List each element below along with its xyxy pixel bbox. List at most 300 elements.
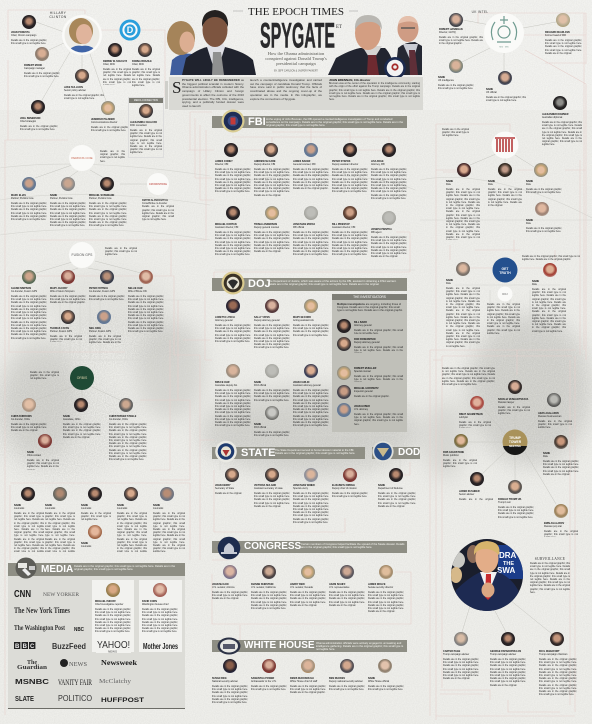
logos: news outlets: Newsweek: [101, 659, 137, 667]
logos: news outlets: McClatchy: [99, 678, 132, 685]
logo: Fusion GPS: FUSION GPS: [72, 253, 92, 257]
person: Nellie Ohr: Wife of Bruce Ohr: [128, 290, 147, 293]
person: Harry Reid: [290, 565, 326, 612]
banner: media: MEDIA: [41, 564, 73, 575]
person: Paul Manafort: PAUL MANAFORT: [539, 650, 560, 653]
person: John Huber: [337, 403, 403, 427]
person: John Podesta: JOHN PODESTA: [11, 31, 30, 34]
person: left of blue logo: Role: [446, 282, 451, 285]
person: John Huber: Details are in the original graphic; this small type is not legible here. Details are in the original graphic; this small type is not legible here.: [354, 413, 403, 426]
person: Donna Brazile: DONNA BRAZILE: [132, 60, 152, 63]
person: Jennifer Palmieri: Communications director: [91, 121, 117, 124]
logos: news outlets: Guardian: [17, 664, 47, 671]
person: Orbis associate: Associate, Orbis: [63, 418, 80, 421]
person: Samantha Power: [251, 659, 287, 695]
person: Jennifer Palmieri: Details are in the original graphic; this small type is not legible here.: [91, 126, 129, 132]
person: Michael Horowitz: [337, 385, 403, 398]
person: Nellie Ohr: [128, 270, 164, 333]
person: Jonathan Winer: [293, 468, 329, 532]
person: UK intelligence officer: Details are in the original graphic; this small type is not legible here.: [438, 84, 474, 90]
person: Jared Kushner: Senior adviser: [459, 493, 474, 496]
person: second official: Details are in the original graphic; this small type is not legible here. Details are in the original graphic; this small type is not legible here. Details are in the original.: [488, 188, 522, 207]
person: Bill Priestap: Details are in the original graphic; this small type is not legible here. Details are in the original graphic; this small type is not legible here. Details are in the original graphic; this small type is not legible here. Details are in the original graphic; this small type is not legible here.: [332, 231, 368, 256]
person: Jared Kushner: JARED KUSHNER: [459, 490, 480, 493]
person: Rob Goldstone: [443, 434, 477, 468]
person: journalist five: [153, 487, 185, 552]
heading and text: surveillance: Details are in the original graphic; this small type is not legible here. Details are in the original graphic; this small type is not legible here. Details are in the original graphic; this small type is not legible here. Details are in the original graphic; this small type is not legible here. Details are in the original graphic; this small type is not legible here.: [530, 562, 570, 594]
person: John Carlin: Details are in the original graphic; this small type is not legible here. Details are in the original graphic; this small type is not legible here. Details are in the original graphic; this small type is not legible here. Details are in the original graphic; this small type is not legible here. Details are in the original graphic; this small type is not legible here. Details are in the original graphic; this small type is not legible here.: [293, 389, 329, 427]
person: Glenn Simpson: Details are in the original graphic; this small type is not legible here. Details are in the original graphic; this small type is not legible here. Details are in the original graphic; this small type is not legible here. Details are in the original graphic; this small type is not legible here. Details are in the original graphic; this small type is not legible here. Details are in the original graphic; this small type is not legible here. Details are in the original graphic; this small type is not legible here.: [11, 295, 47, 340]
person: CrowdStrike executive: Details are in the original graphic; this small type is not legible here. Details are in the original graphic; this small type is not legible here.: [142, 205, 174, 221]
headline and subhead: presidential campaign: [276, 61, 317, 66]
person: Jake Sullivan: JAKE SULLIVAN: [64, 86, 83, 89]
person: Mary McCord: Acting assistant AG: [293, 319, 314, 322]
person: fourth official: NAME: [526, 219, 533, 222]
person: Joel Benenson: JOEL BENENSON: [20, 117, 40, 120]
person: Dianne Feinstein: [251, 565, 287, 618]
person: Joseph Pientka: JOSEPH PIENTKA: [371, 228, 392, 231]
person: Robert Mook: Campaign manager: [24, 67, 45, 70]
person: Orbis contact: Orbis contact: [27, 454, 41, 457]
person: Bill Priestap: [332, 206, 368, 266]
person: DOD official: [378, 468, 416, 512]
person: journalist one: NAME: [14, 504, 21, 507]
person: journalist three: [81, 487, 111, 521]
person: James Wolfe: Details are in the original graphic; this small type is not legible here. Details are in the original graphic; this small type is not legible here. Details are in the original graphic; this small type is not legible here. Details are in the original.: [368, 591, 404, 613]
person: DOJ official: DOJ official: [254, 384, 266, 387]
person: John Huber: U.S. attorney: [354, 408, 368, 411]
logo: Trump Tower: MEETING: [509, 444, 521, 448]
logos: news outlets: The Washington Post: [14, 624, 66, 632]
vertical credit: [165, 81, 168, 109]
person: journalist six: NAME: [81, 542, 88, 545]
person: Orbis contact: [27, 434, 59, 470]
person: Michael Horowitz: Inspector general: [354, 390, 372, 393]
person: Susan Rice: Details are in the original graphic; this small type is not legible here. Details are in the original graphic; this small type is not legible here. Details are in the original graphic; this small type is not legible here.: [212, 685, 248, 704]
person: journalist three: Journalist: [81, 507, 91, 510]
intro column three: John Brennan: Brennan was at the center of the operation in the intelligence community, starting with the origin of the effort against the Trump campaign. Details are in the original graphic; this small type is not legible here. Details are in the original graphic; this small type is not legible here. Details are in the original graphic; this small type is not legible here. Details are in the original graphic; this small type is not legible here.: [329, 82, 420, 101]
person: Sally Yates: Deputy attorney general: [254, 319, 280, 322]
person: Jake Sullivan: Senior policy adviser: [64, 89, 86, 92]
person: Denis McDonough: Details are in the original graphic; this small type is not legible here. Details are in the original graphic.: [290, 685, 326, 694]
person: left of blue logo: Details are in the original graphic; this small type is not legible here. Details are in the original graphic; this small type is not legible here. Details are in the original graphic; this small type is not legible here. Details are in the original graphic; this small type is not legible here. Details are in the original graphic; this small type is not legible here. Details are in the original graphic; this small type is not legible here. Details are in the original graphic; this small type is not legible here. Details are in the original graphic; this small type is not legible here.: [446, 287, 480, 348]
person: DOJ official: NAME: [254, 381, 261, 384]
logos: news outlets: NEW YORKER: [43, 592, 79, 598]
person: Robert Mueller: [337, 366, 403, 382]
person: Elizabeth Dibble: [332, 468, 368, 502]
person: John Carlin: Assistant attorney general: [293, 384, 321, 387]
person: UK intelligence officer: NAME: [438, 76, 445, 79]
person: Robert Mook: [24, 47, 60, 78]
person: Trisha Anderson: Details are in the original graphic; this small type is not legible here. Details are in the original graphic; this small type is not legible here. Details are in the original graphic; this small type is not legible here. Details are in the original.: [254, 231, 290, 253]
person: Jake Sullivan: [64, 69, 104, 100]
person: Harry Reid: Details are in the original graphic; this small type is not legible here. Details are in the original graphic; this small type is not legible here. Details are in the original.: [290, 591, 326, 607]
person: Michael Isikoff: [95, 583, 131, 633]
person: Sally Yates: [254, 299, 290, 356]
person: Rod Rosenstein: ROD ROSENSTEIN: [354, 338, 376, 341]
banner: DOD: [372, 441, 420, 463]
banner: media: Details are in the original graphic; this small type is not legible here. Details are in the original graphic; this small type is not legible here.: [74, 565, 175, 571]
person: journalist three: NAME: [81, 504, 88, 507]
photo: Donald Trump with campaign sign: SWA: [497, 566, 515, 575]
person: Adam Schiff: ADAM SCHIFF: [329, 583, 345, 586]
person: Marc Elias: Details are in the original graphic; this small type is not legible here. Details are in the original graphic; this small type is not legible here. Details are in the original graphic; this small type is not legible here.: [11, 202, 47, 221]
photo: Donald Trump with campaign sign: DRA: [499, 551, 517, 560]
panel: intro text: [169, 77, 423, 110]
person: Orbis associate: [63, 398, 101, 439]
logos: news outlets: The: [27, 660, 37, 666]
person: Marc Elias: [11, 177, 47, 221]
person: third official: [526, 163, 562, 198]
banner: FBI: FBI: [248, 116, 266, 128]
person: meeting attendee: NAME: [543, 452, 550, 455]
person: Michael Kortan: Assistant director, FBI: [215, 226, 238, 229]
person: Paul Manafort: Details are in the original graphic; this small type is not legible here. Details are in the original graphic; this small type is not legible here. Details are in the original graphic; this small type is not legible here. Details are in the original graphic; this small type is not legible here. Details are in the original graphic; this small type is not legible here. Details are in the original graphic; this small type is not legible here.: [539, 658, 577, 696]
person: journalist one: [14, 487, 44, 552]
person: Bruce Ohr: BRUCE OHR: [215, 381, 229, 384]
person: journalist four: [117, 487, 147, 552]
logos: news outlets: Mother Jones: [143, 642, 178, 651]
person: right of blue logo: [532, 263, 566, 338]
person: Mary Jacoby: Details are in the original graphic; this small type is not legible here. Details are in the original graphic.: [50, 295, 86, 304]
person: Jonathan Winer: Details are in the original graphic; this small type is not legible here. Details are in the original graphic; this small type is not legible here. Details are in the original graphic; this small type is not legible here. Details are in the original graphic; this small type is not legible here. Details are in the original graphic; this small type is not legible here.: [293, 492, 329, 524]
person: Dianne Feinstein: U.S. senator, California: [251, 586, 276, 589]
panel: media connection: MEDIA CONNECTION: [134, 99, 158, 102]
person: White House official: White House official: [368, 680, 389, 683]
person: left of blue logo: [446, 262, 480, 352]
logo: Trump Tower: TOWER: [509, 440, 522, 444]
person: Ben Rhodes: Deputy national security adviser: [329, 680, 363, 683]
person: Michael Sussmann: [89, 177, 127, 227]
note: Fusion GPS: Details are in the original graphic; this small type is not legible here.: [105, 247, 137, 256]
person: official left of pillars row: [446, 163, 480, 240]
person: Glenn Simpson: [11, 270, 47, 340]
person: Lisa Page: [371, 143, 407, 200]
person: Denis McDonough: [290, 659, 326, 700]
card: Michael Isikoff: [92, 580, 134, 652]
person: Carter Page: CARTER PAGE: [443, 650, 460, 653]
person: UK intelligence officer: [438, 59, 474, 92]
person: third official: Details are in the original graphic; this small type is not legible here.: [526, 188, 562, 194]
person: DOD official: Details are in the original graphic; this small type is not legible here. Details are in the original graphic; this small type is not legible here. Details are in the original.: [378, 492, 416, 508]
person: Nellie Ohr: Details are in the original graphic; this small type is not legible here. Details are in the original graphic; this small type is not legible here. Details are in the original graphic; this small type is not legible here. Details are in the original graphic; this small type is not legible here. Details are in the original graphic; this small type is not legible here. Details are in the original graphic; this small type is not legible here.: [128, 295, 164, 333]
note: Perkins Coie: Details are in the original graphic; this small type is not legible here.: [100, 150, 125, 163]
person: UK official: UK official: [486, 91, 497, 94]
person: journalist three: Details are in the original graphic; this small type is not legible here.: [81, 512, 111, 521]
person: Peter Fritsch: Details are in the original graphic; this small type is not legible here.: [89, 295, 125, 301]
headline and subhead: How the Obama administration: [268, 51, 325, 56]
person: Andrew McCabe: Details are in the original graphic; this small type is not legible here. Details are in the original graphic; this small type is not legible here. Details are in the original graphic; this small type is not legible here. Details are in the original graphic; this small type is not legible here. Details are in the original.: [254, 168, 290, 197]
banner: Congress: [212, 536, 407, 560]
person: Sally Yates: Details are in the original graphic; this small type is not legible here. Details are in the original graphic; this small type is not legible here. Details are in the original graphic; this small type is not legible here. Details are in the original graphic; this small type is not legible here.: [254, 324, 290, 349]
person: Jake Sullivan: Details are in the original graphic; this small type is not legible here.: [64, 94, 104, 100]
person: Bill Priestap: Assistant director, FBI: [332, 226, 355, 229]
logos: news outlets: The New York Times: [14, 606, 70, 615]
logo: CrowdStrike: CROWDSTRIKE: [149, 183, 167, 186]
person: John Kerry: JOHN KERRY: [215, 484, 231, 487]
person: Glenn Simpson: GLENN SIMPSON: [11, 287, 31, 290]
person: George Papadopoulos: Trump campaign adviser: [490, 653, 516, 656]
person: second official: NAME: [488, 180, 495, 183]
person: Mary McCord: [293, 299, 329, 342]
person: journalist four: Journalist: [117, 507, 127, 510]
person: Perkins Coie partner: Partner, Perkins Coie: [50, 197, 73, 200]
person: Jonathan Winer: Special envoy: [293, 487, 308, 490]
person: Peter Fritsch: [89, 270, 125, 301]
logo: Orbis: [70, 366, 94, 390]
person: James Baker: General counsel, FBI: [293, 163, 315, 166]
banner: DOJ: DOJ: [248, 278, 271, 290]
person: John Podesta: [11, 15, 47, 45]
headline and subhead: SPYGATE: [260, 16, 335, 56]
person: Robert Hannigan: ROBERT HANNIGAN: [439, 28, 463, 31]
person: Aras Agalarov: [538, 393, 572, 428]
person: Perkins Coie partner: [50, 177, 86, 227]
person: Alexandra Chalupa: Details are in the original graphic; this small type is not legible here. Details are in the original graphic; this small type is not legible here. Details are in the original graphic; this small type is not legible here.: [130, 129, 162, 154]
person: Robert Mook: ROBERT MOOK: [24, 64, 42, 67]
person: Chris Burrows: CHRIS BURROWS: [11, 415, 32, 418]
banner: FBI: At the urging of John Brennan, the FBI opened a counterintelligence investigation of Trump and conducted surveillance on his campaign. Details are in the original graphic; this small type is not legible here. Details are in the original graphic; this small type is not legible here.: [266, 118, 403, 127]
person: John Podesta: Details are in the original graphic; this small type is not legible here.: [11, 39, 47, 45]
person: White House official: [368, 659, 404, 698]
person: Christopher Steele: Co-founder, Orbis: [109, 418, 128, 421]
person: Orbis contact: NAME: [27, 451, 34, 454]
person: John Kerry: Secretary of State: [215, 487, 234, 490]
person: Ben Rhodes: Details are in the original graphic; this small type is not legible here.: [329, 685, 365, 691]
person: Samantha Power: SAMANTHA POWER: [251, 677, 274, 680]
person: Thomas Catan: Partner, Fusion GPS: [50, 330, 72, 333]
person: Trisha Anderson: TRISHA ANDERSON: [254, 223, 277, 226]
person: Robert Hannigan: [439, 13, 483, 48]
person: Lisa Page: Details are in the original graphic; this small type is not legible here. Details are in the original graphic; this small type is not legible here. Details are in the original graphic; this small type is not legible here. Details are in the original graphic; this small type is not legible here. Details are in the original graphic; this small type is not legible here.: [371, 168, 407, 200]
person: Ben Rhodes: BEN RHODES: [329, 677, 345, 680]
person: John McCain: JOHN McCAIN: [212, 583, 228, 586]
person: David Corn: Details are in the original graphic; this small type is not legible here. Details are in the original graphic; this small type is not legible here. Details are in the original graphic; this small type is not legible here. Details are in the original graphic; this small type is not legible here.: [142, 608, 178, 633]
person: Michael Kortan: Details are in the original graphic; this small type is not legible here. Details are in the original graphic; this small type is not legible here. Details are in the original graphic; this small type is not legible here. Details are in the original graphic; this small type is not legible here.: [215, 231, 251, 256]
person: Bruce Ohr: Associate deputy AG: [215, 384, 237, 387]
person: Joel Benenson: Details are in the original graphic; this small type is not legible here.: [20, 125, 58, 131]
person: Rinat Akhmetshin: RINAT AKHMETSHIN: [459, 413, 483, 416]
person: Harry Reid: HARRY REID: [290, 583, 305, 586]
person: Bill Barr: Attorney general: [354, 324, 372, 327]
person: Jonathan Moffa: JONATHAN MOFFA: [293, 223, 315, 226]
logos: news outlets: VANITY FAIR: [58, 678, 92, 687]
person: Harry Reid: U.S. senator, Nevada: [290, 586, 313, 589]
person: James Wolfe: Senate security director: [368, 586, 393, 589]
person: Elizabeth Dibble: Deputy chief of mission: [332, 487, 357, 490]
person: Joel Benenson: Chief strategist: [20, 120, 36, 123]
person: Alexander Downer: Details are in the original graphic; this small type is not legible here. Details are in the original graphic; this small type is not legible here. Details are in the original graphic; this small type is not legible here. Details are in the original graphic; this small type is not legible here.: [542, 121, 582, 146]
person: journalist one: Journalist: [14, 507, 24, 510]
logos: news outlets: NEWS: [108, 650, 117, 654]
person: Donald Trump Jr.: Details are in the original graphic; this small type is not legible here. Details are in the original graphic; this small type is not legible here.: [498, 506, 534, 519]
headline and subhead: ET: [336, 25, 342, 30]
person: Chris Burrows: Co-founder, Orbis: [11, 418, 30, 421]
person: journalist six: Journalist: [81, 545, 91, 548]
person: Paul Manafort: [539, 632, 577, 708]
person: Marc Elias: MARC ELIAS: [11, 194, 26, 197]
person: UK official: [486, 71, 526, 105]
person: Christopher Steele: [109, 398, 147, 461]
person: Adam Schiff: Details are in the original graphic; this small type is not legible here. Details are in the original graphic; this small type is not legible here. Details are in the original.: [329, 591, 365, 607]
logos: news outlets: YAHOO!: [97, 640, 130, 651]
banner: DOJ: The Department of Justice, which was aware of the actions by the FBI, assisted in obtaining a FISA warrant. Details are in the original graphic; this small type is not legible here. Details are in the original.: [268, 280, 396, 286]
person: journalist five: Journalist: [153, 507, 163, 510]
banner: Congress: CONGRESS: [244, 541, 301, 552]
person: Mary McCord: Details are in the original graphic; this small type is not legible here. Details are in the original graphic; this small type is not legible here.: [293, 324, 329, 337]
person: Alexandra Chalupa: ALEXANDRA CHALUPA: [130, 121, 157, 124]
person: Chris Burrows: Details are in the original graphic; this small type is not legible here. Details are in the original.: [11, 423, 47, 432]
icon: Hillary Clinton portrait: [62, 15, 102, 55]
person: Michael Isikoff: Chief investigative reporter: [95, 603, 123, 606]
person: Rob Goldstone: ROB GOLDSTONE: [443, 451, 464, 454]
person: Thomas Catan: [50, 310, 82, 342]
person: Robert Hannigan: Director, GCHQ: [439, 31, 456, 34]
person: Joseph Pientka: Details are in the original graphic; this small type is not legible here. Details are in the original graphic; this small type is not legible here. Details are in the original graphic; this small type is not legible here. Details are in the original.: [371, 236, 407, 258]
person: Bill Barr: [337, 319, 403, 334]
person: Loretta Lynch: LORETTA LYNCH: [215, 316, 235, 319]
person: Debbie Wasserman Schultz: Chair, DNC: [103, 63, 115, 66]
person: fourth official: [526, 202, 562, 240]
person: DOJ official: Details are in the original graphic; this small type is not legible here. Details are in the original graphic; this small type is not legible here.: [254, 389, 290, 402]
person: journalist six: [81, 525, 102, 548]
person: Loretta Lynch: Details are in the original graphic; this small type is not legible here. Details are in the original graphic; this small type is not legible here. Details are in the original graphic; this small type is not legible here.: [215, 324, 251, 343]
person: CrowdStrike executive: DMITRI ALPEROVITCH: [142, 199, 168, 202]
person: right of blue logo: Details are in the original graphic; this small type is not legible here. Details are in the original graphic; this small type is not legible here. Details are in the original graphic; this small type is not legible here. Details are in the original graphic; this small type is not legible here. Details are in the original graphic; this small type is not legible here. Details are in the original graphic; this small type is not legible here.: [532, 288, 566, 333]
person: Ben Rhodes: [329, 659, 365, 697]
person: Bruce Ohr: [215, 364, 251, 438]
logos: news outlets: MSNBC: [15, 677, 50, 686]
person: Elizabeth Dibble: Details are in the original graphic; this small type is not legible here.: [332, 492, 368, 498]
person: Michael Horowitz: Details are in the original graphic.: [354, 395, 389, 398]
headline and subhead: BY JEFF CARLSON & JASPER FAKKERT: [274, 70, 318, 72]
person: Michael Isikoff: MICHAEL ISIKOFF: [95, 600, 116, 603]
logos: news outlets: SLATE: [15, 696, 34, 703]
person: James Comey: JAMES COMEY: [215, 160, 233, 163]
person: Victoria Nuland: [254, 468, 290, 515]
banner: State: [212, 441, 365, 463]
person: Paul Manafort: Trump campaign chairman: [539, 653, 567, 656]
card: David Corn: [139, 580, 182, 652]
person: Robert Mueller: ROBERT MUELLER: [354, 367, 376, 370]
person: Donna Brazile: [132, 43, 160, 87]
person: Aras Agalarov: Russian businessman: [538, 415, 561, 418]
person: Aras Agalarov: ARAS AGALAROV: [538, 412, 559, 415]
person: Dianne Feinstein: DIANNE FEINSTEIN: [251, 583, 273, 586]
banner: State: STATE: [241, 447, 275, 459]
note: Orbis: Details are in the original graphic; this small type is not legible here.: [30, 371, 59, 380]
person: Andrew McCabe: ANDREW McCABE: [254, 160, 276, 163]
person: Natalia Veselnitskaya: NATALIA VESELNITSKAYA: [498, 398, 528, 401]
person: John McCain: Details are in the original graphic; this small type is not legible here. Details are in the original.: [212, 591, 248, 600]
person: official left of pillars row: NAME: [446, 180, 453, 183]
person: David Corn: Washington bureau chief: [142, 603, 168, 606]
person: Richard Dearlove: Details are in the original graphic; this small type is not legible here. Details are in the original graphic; this small type is not legible here. Details are in the original.: [545, 39, 582, 55]
person: DOJ official two: DOJ official: [254, 426, 266, 429]
person: James Comey: Details are in the original graphic; this small type is not legible here. Details are in the original graphic; this small type is not legible here. Details are in the original graphic; this small type is not legible here. Details are in the original graphic; this small type is not legible here.: [215, 168, 251, 193]
person: Donna Brazile: Chair, DNC: [132, 63, 144, 66]
person: DOJ official: [254, 364, 290, 405]
person: Andrew McCabe: Deputy director, FBI: [254, 163, 275, 166]
person: Alexander Downer: ALEXANDER DOWNER: [542, 113, 568, 116]
person: Loretta Lynch: [215, 299, 251, 351]
person: Bruce Ohr: Details are in the original graphic; this small type is not legible here. Details are in the original graphic; this small type is not legible here. Details are in the original graphic; this small type is not legible here. Details are in the original graphic; this small type is not legible here. Details are in the original graphic; this small type is not legible here. Details are in the original graphic; this small type is not legible here.: [215, 389, 251, 427]
person: Neil King: Partner, Fusion GPS: [89, 330, 111, 333]
person: Victoria Nuland: VICTORIA NULAND: [254, 484, 276, 487]
person: Lisa Page: LISA PAGE: [371, 160, 384, 163]
person: Michael Kortan: [215, 206, 251, 256]
person: Jennifer Palmieri: JENNIFER PALMIERI: [91, 118, 115, 121]
person: Christopher Steele: Details are in the original graphic; this small type is not legible here. Details are in the original graphic; this small type is not legible here. Details are in the original graphic; this small type is not legible here. Details are in the original graphic; this small type is not legible here. Details are in the original graphic; this small type is not legible here. Details are in the original graphic; this small type is not legible here.: [109, 423, 147, 461]
icon: Democratic Party logo: D: [127, 25, 134, 35]
person: Samantha Power: Details are in the original graphic; this small type is not legible here.: [251, 685, 287, 691]
banner: DOJ: [212, 272, 407, 296]
logo: Trump Tower: TRUMP: [509, 436, 522, 440]
person: Adam Schiff: [329, 565, 365, 612]
person: Alexandra Chalupa: DNC consultant: [130, 124, 147, 127]
note: below blue logo: Details are in the original graphic; this small type is not legible here. Details are in the original graphic; this small type is not legible here. Details are in the original graphic; this small type is not legible here. Details are in the original graphic; this small type is not legible here.: [487, 303, 520, 334]
person: John Kerry: Details are in the original.: [215, 492, 242, 495]
banner: State: The State Department served to funnel dossier material to the FBI. Details are in the original graphic; this small type is not legible here.: [275, 448, 355, 455]
person: John Kerry: [215, 468, 251, 495]
person: DOD official: Department of Defense: [378, 487, 403, 490]
person: Trisha Anderson: Deputy general counsel: [254, 226, 279, 229]
person: Natalia Veselnitskaya: Russian lawyer: [498, 401, 514, 404]
person: Perkins Coie partner: Details are in the original graphic; this small type is not legible here. Details are in the original graphic; this small type is not legible here. Details are in the original graphic; this small type is not legible here. Details are in the original graphic; this small type is not legible here.: [50, 202, 86, 227]
person: Joseph Pientka: [371, 211, 407, 265]
person: Rinat Akhmetshin: [459, 396, 491, 428]
person: Jonathan Moffa: Details are in the original graphic; this small type is not legible here. Details are in the original graphic; this small type is not legible here. Details are in the original graphic; this small type is not legible here. Details are in the original graphic; this small type is not legible here.: [293, 231, 329, 256]
panel: the investigators: THE INVESTIGATORS: [353, 295, 386, 299]
person: White House official: Details are in the original graphic; this small type is not legible here.: [368, 685, 404, 691]
person: DOJ official two: [254, 406, 290, 442]
person: journalist two: Journalist: [45, 507, 55, 510]
icon: blue round logo with small logo beneath: TRUTH: [499, 271, 511, 275]
person: Loretta Lynch: Attorney general: [215, 319, 233, 322]
logos: news outlets: BuzzFeed: [52, 642, 86, 651]
person: second official: Role: [488, 183, 493, 186]
logo: Perkins Coie: [69, 145, 95, 171]
person: Alexander Downer: Australian diplomat: [542, 116, 562, 119]
person: journalist four: NAME: [117, 504, 124, 507]
person: Mary Jacoby: Wife of Glenn Simpson: [50, 290, 74, 293]
person: George Papadopoulos: [490, 632, 526, 695]
person: fourth official: Details are in the original graphic; this small type is not legible here.: [526, 227, 562, 233]
person: Bill Priestap: BILL PRIESTAP: [332, 223, 350, 226]
person: Peter Strzok: Details are in the original graphic; this small type is not legible here. Details are in the original graphic; this small type is not legible here. Details are in the original graphic; this small type is not legible here. Details are in the original graphic; this small type is not legible here.: [332, 168, 368, 193]
person: Peter Fritsch: Co-founder, Fusion GPS: [89, 290, 115, 293]
person: DOD official: NAME: [378, 484, 385, 487]
person: John Carlin: [293, 364, 329, 435]
person: Orbis associate: NAME: [63, 415, 70, 418]
person: David Corn: [142, 583, 178, 633]
person: Michael Kortan: MICHAEL KORTAN: [215, 223, 237, 226]
banner: media: [8, 558, 185, 578]
note: Trump Tower meeting: Details are in the original graphic; this small type is not legible here. Details are in the original graphic; this small type is not legible here. Details are in the original graphic; this small type is not legible here. Details are in the original graphic; this small type is not legible here.: [442, 367, 495, 386]
person: James Baker: Details are in the original graphic; this small type is not legible here. Details are in the original graphic; this small type is not legible here. Details are in the original graphic; this small type is not legible here. Details are in the original graphic.: [293, 168, 329, 190]
person: James Comey: [215, 143, 251, 193]
logo: Orbis: ORBIS: [77, 376, 87, 380]
hero photos: Clinton and Obama, Brennan and Clapper: [167, 10, 422, 75]
person: Victoria Nuland: Assistant secretary of state: [254, 487, 283, 490]
person: Natalia Veselnitskaya: Details are in the original graphic; this small type is not legible here.: [498, 406, 530, 415]
person: Rod Rosenstein: [337, 337, 403, 353]
person: Donald Trump Jr.: Trump's son: [498, 501, 511, 504]
logo: CrowdStrike: [147, 173, 169, 195]
icon: blue round logo with small logo beneath: DOJ: [502, 292, 508, 296]
banner: FBI: [212, 110, 407, 132]
person: Emin Agalarov: [544, 504, 578, 537]
